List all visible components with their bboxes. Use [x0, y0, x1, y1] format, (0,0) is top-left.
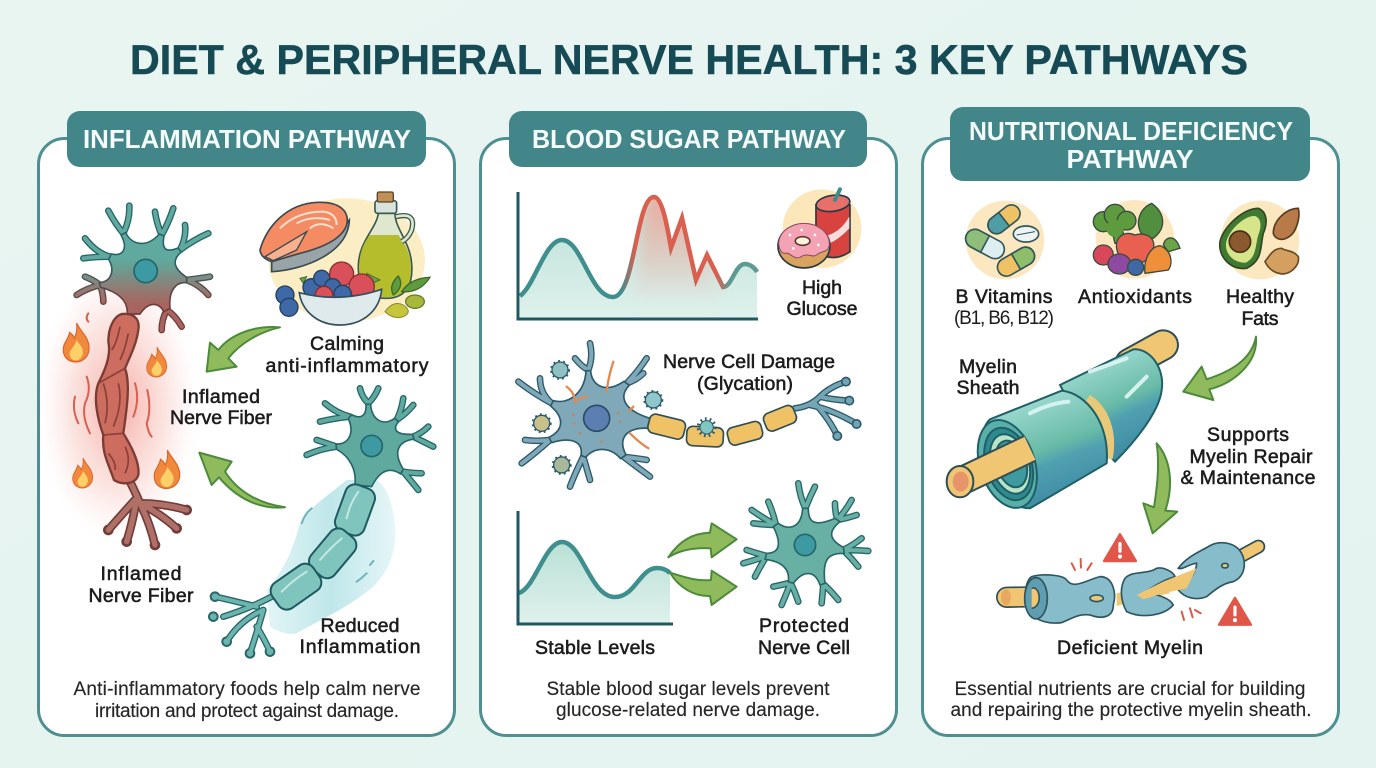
label: b vitamins: (B1, B6, B12) [954, 308, 1054, 329]
icon: warning triangle [1219, 598, 1251, 625]
label: b vitamins: B Vitamins [956, 286, 1053, 308]
icon: healthy fats [1220, 201, 1299, 279]
panel: nutritional deficiency pathway [922, 107, 1338, 736]
heading: inflammation pathway: INFLAMMATION PATHWAY [83, 124, 411, 154]
label: high glucose: High [802, 277, 842, 299]
chart: glucose spikes [518, 190, 758, 319]
icon: anti-inflammatory foods [260, 192, 430, 325]
heading: nutritional deficiency pathway [950, 107, 1310, 181]
label: nerve cell damage: (Glycation) [697, 373, 793, 395]
healthy neuron body [307, 388, 433, 490]
illustration: deficient myelin [1001, 543, 1258, 623]
panel: blood sugar pathway [480, 111, 896, 736]
icon: flame [154, 450, 180, 488]
label: myelin sheath: Myelin [959, 356, 1017, 378]
icon: b vitamin pills [962, 201, 1044, 279]
label: high glucose [786, 277, 858, 320]
label: myelin sheath [956, 356, 1020, 399]
label: supports myelin repair: & Maintenance [1180, 467, 1316, 489]
healthy neuron illustration [208, 388, 433, 659]
icon: flame [63, 323, 89, 362]
label: protected nerve cell: Protected [759, 615, 849, 637]
caption: nutrients: Essential nutrients are crucial for building [954, 679, 1306, 700]
label: healthy fats: Healthy [1226, 286, 1294, 308]
title: DIET & PERIPHERAL NERVE HEALTH: 3 KEY PATHWAYS [130, 36, 1248, 83]
label: supports myelin repair [1180, 424, 1316, 489]
label: inflamed nerve fiber: Nerve Fiber [170, 407, 272, 429]
heading: blood sugar pathway: BLOOD SUGAR PATHWAY [532, 124, 846, 154]
label: myelin sheath: Sheath [956, 377, 1020, 399]
caption: inflammation: Anti-inflammatory foods help calm nerve [74, 679, 420, 700]
label: calming anti-inflammatory: anti-inflammatory [266, 355, 429, 377]
label: healthy fats: Fats [1242, 308, 1279, 330]
heading: nutritional deficiency pathway: NUTRITIONAL DEFICIENCY [969, 116, 1293, 146]
arrow: reduced inflammation to fiber [199, 453, 285, 508]
label: stable levels: Stable Levels [535, 637, 655, 659]
blue wash [267, 480, 395, 634]
label: reduced inflammation: Inflammation [300, 636, 420, 658]
panel: inflammation pathway [38, 111, 454, 736]
heading: nutritional deficiency pathway: PATHWAY [1066, 144, 1194, 174]
label: inflamed nerve fiber lower: Nerve Fiber [88, 585, 194, 607]
heading: blood sugar pathway [509, 111, 867, 167]
label: antioxidants: Antioxidants [1078, 286, 1192, 308]
inflamed neuron illustration [40, 206, 210, 550]
caption: blood sugar [546, 679, 830, 721]
arrow: myelin to deficiency [1143, 443, 1177, 533]
label: nerve cell damage [663, 351, 835, 395]
icon: flame [147, 347, 167, 377]
inflammation glow [40, 270, 196, 540]
inflamed neuron [74, 206, 210, 550]
neuron: protected nerve cell [743, 483, 868, 605]
axon segments [208, 482, 378, 659]
caption: inflammation: irritation and protect against damage. [95, 701, 399, 722]
label: healthy fats [1226, 286, 1294, 330]
caption: nutrients [950, 679, 1312, 721]
label: b vitamins [954, 286, 1054, 329]
icon: flame [73, 458, 93, 488]
caption: nutrients: and repairing the protective myelin sheath. [950, 700, 1312, 721]
icon: donut and soda [778, 189, 861, 268]
label: protected nerve cell: Nerve Cell [758, 637, 850, 659]
panel 3 card [922, 138, 1338, 736]
caption: inflammation [74, 679, 420, 722]
label: inflamed nerve fiber lower: Inflamed [100, 563, 182, 585]
arrow: stable levels to protected cell [668, 523, 737, 605]
illustrations: nutrients and myelin [947, 200, 1299, 625]
panel 2 card [480, 138, 896, 736]
label: inflamed nerve fiber [170, 386, 272, 429]
label: inflamed nerve fiber lower [88, 563, 194, 607]
label: calming anti-inflammatory [266, 333, 429, 377]
label: inflamed nerve fiber: Inflamed [182, 386, 260, 408]
label: high glucose: Glucose [786, 298, 858, 320]
label: calming anti-inflammatory: Calming [310, 333, 384, 355]
illustration: healthy myelin sheath [947, 345, 1163, 516]
chart: stable levels [518, 511, 673, 624]
caption: blood sugar: Stable blood sugar levels prevent [546, 679, 830, 700]
caption: blood sugar: glucose-related nerve damage. [556, 700, 820, 721]
label: nerve cell damage: Nerve Cell Damage [663, 351, 835, 373]
label: supports myelin repair: Myelin Repair [1190, 446, 1313, 468]
label: deficient myelin: Deficient Myelin [1057, 637, 1203, 659]
neuron: glycation damage [518, 343, 862, 487]
arrow: foods to inflamed fiber [207, 327, 280, 372]
panel 1 card [38, 138, 454, 736]
label: reduced inflammation [300, 615, 420, 658]
label: supports myelin repair: Supports [1207, 424, 1289, 446]
label: reduced inflammation: Reduced [320, 615, 400, 637]
icon: antioxidant foods [1093, 200, 1180, 279]
label: protected nerve cell [758, 615, 850, 659]
icon: warning triangle [1104, 534, 1136, 561]
heading: inflammation pathway [67, 111, 426, 167]
arrow: nutrients to myelin [1183, 337, 1256, 400]
